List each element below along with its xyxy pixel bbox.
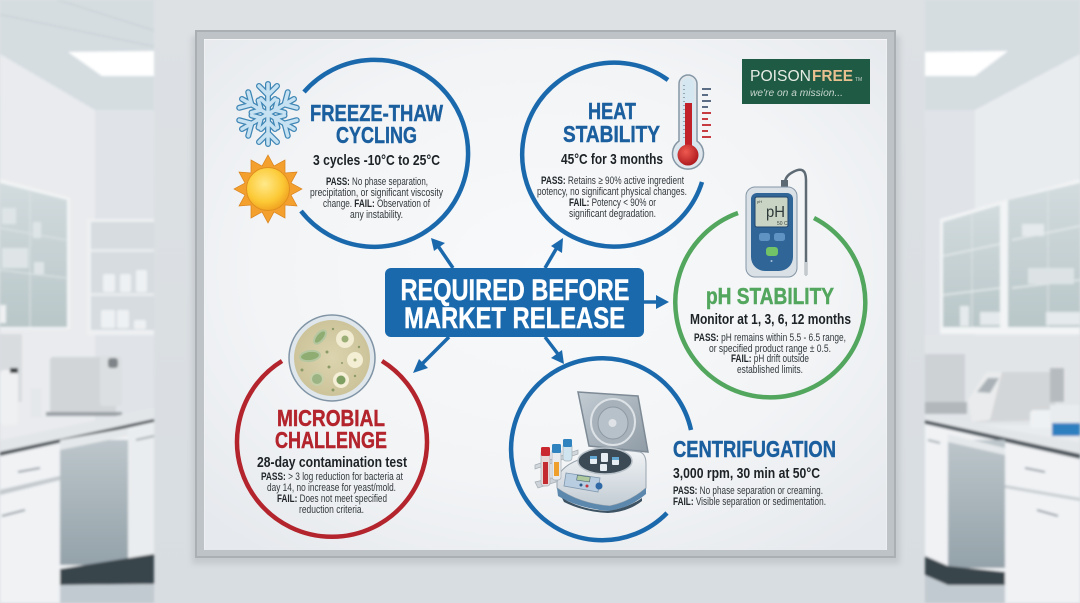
pH condition: Monitor at 1, 3, 6, 12 months (690, 311, 851, 328)
logo: PoisonFree: FREE (812, 68, 853, 85)
centrifugation title: CENTRIFUGATION (673, 436, 836, 462)
arrow: to freeze-thaw (431, 238, 453, 268)
centrifugation ring (511, 358, 691, 540)
heat criteria (537, 175, 687, 220)
heat title: STABILITY (563, 121, 660, 147)
central banner (385, 268, 644, 337)
heat ring (522, 63, 702, 247)
arrow: to centrifugation (545, 337, 564, 364)
icon: petri dish (289, 315, 375, 401)
arrow: to heat stability (545, 238, 563, 268)
icon: thermometer (672, 75, 711, 169)
arrow: to microbial challenge (413, 337, 449, 373)
pH ring (675, 213, 865, 397)
centrifugation criteria (673, 485, 826, 508)
central banner: REQUIRED BEFORE (400, 274, 630, 307)
heat condition: 45°C for 3 months (561, 151, 663, 168)
freeze-thaw condition: 3 cycles -10°C to 25°C (313, 152, 440, 169)
pH criteria: FAIL: pH drift outside (731, 353, 809, 365)
heat criteria: significant degradation. (569, 208, 656, 220)
icon: pH meter (746, 170, 807, 277)
centrifugation criteria: PASS: No phase separation or creaming. (673, 485, 823, 497)
freeze-thaw criteria: PASS: No phase separation, (326, 176, 428, 188)
microbial title: CHALLENGE (275, 427, 387, 453)
central banner: MARKET RELEASE (404, 302, 625, 335)
panel: centrifugation (511, 358, 836, 540)
freeze-thaw criteria (310, 176, 443, 221)
microbial condition: 28-day contamination test (257, 454, 407, 471)
heat criteria: PASS: Retains ≥ 90% active ingredient (541, 175, 684, 187)
pH criteria: established limits. (737, 364, 803, 376)
pH criteria: or specified product range ± 0.5. (709, 343, 831, 355)
pH title: pH STABILITY (706, 283, 834, 309)
freeze-thaw title: CYCLING (336, 122, 417, 148)
icon: pH meter: 50 C (777, 221, 788, 227)
panel: freeze-thaw cycling (234, 60, 468, 247)
microbial criteria (261, 471, 403, 516)
freeze-thaw title (310, 100, 443, 148)
microbial criteria: FAIL: Does not meet specified (277, 493, 387, 505)
freeze-thaw criteria: change. FAIL: Observation of (323, 198, 431, 210)
microbial title: MICROBIAL (277, 405, 385, 431)
icon: snowflake (238, 84, 298, 144)
freeze-thaw ring (301, 60, 468, 247)
logo: PoisonFree: POISON (750, 68, 811, 85)
microbial criteria: reduction criteria. (299, 504, 364, 516)
logo: PoisonFree: TM (855, 77, 862, 83)
logo: PoisonFree: we're on a mission... (750, 88, 843, 99)
panel: microbial challenge (237, 315, 427, 537)
left lab scene (0, 0, 154, 603)
microbial ring (237, 361, 427, 537)
microbial criteria: day 14, no increase for yeast/mold. (267, 482, 396, 494)
icon: pH meter: pH (766, 204, 785, 221)
right lab scene (925, 0, 1080, 603)
panel: pH stability (675, 170, 865, 397)
freeze-thaw criteria: precipitation, or significant viscosity (310, 187, 443, 199)
whiteboard panel (192, 30, 900, 564)
icon: pH meter: pH (757, 199, 762, 204)
heat title (563, 98, 660, 147)
centrifugation criteria: FAIL: Visible separation or sedimentation. (673, 496, 826, 508)
icon: sun (234, 155, 302, 223)
heat criteria: FAIL: Potency < 90% or (569, 197, 656, 209)
pH criteria: PASS: pH remains within 5.5 - 6.5 range, (694, 332, 846, 344)
heat title: HEAT (588, 98, 636, 124)
freeze-thaw title: FREEZE-THAW (310, 100, 443, 126)
heat criteria: potency, no significant physical changes. (537, 186, 687, 198)
centrifugation condition: 3,000 rpm, 30 min at 50°C (673, 465, 820, 482)
arrow: to pH stability (644, 295, 669, 309)
pH criteria (694, 332, 846, 376)
icon: centrifuge (535, 392, 648, 513)
freeze-thaw criteria: any instability. (350, 209, 403, 221)
microbial title (275, 405, 387, 453)
microbial criteria: PASS: > 3 log reduction for bacteria at (261, 471, 403, 483)
panel: heat stability (522, 63, 711, 247)
logo: PoisonFree (742, 59, 870, 104)
